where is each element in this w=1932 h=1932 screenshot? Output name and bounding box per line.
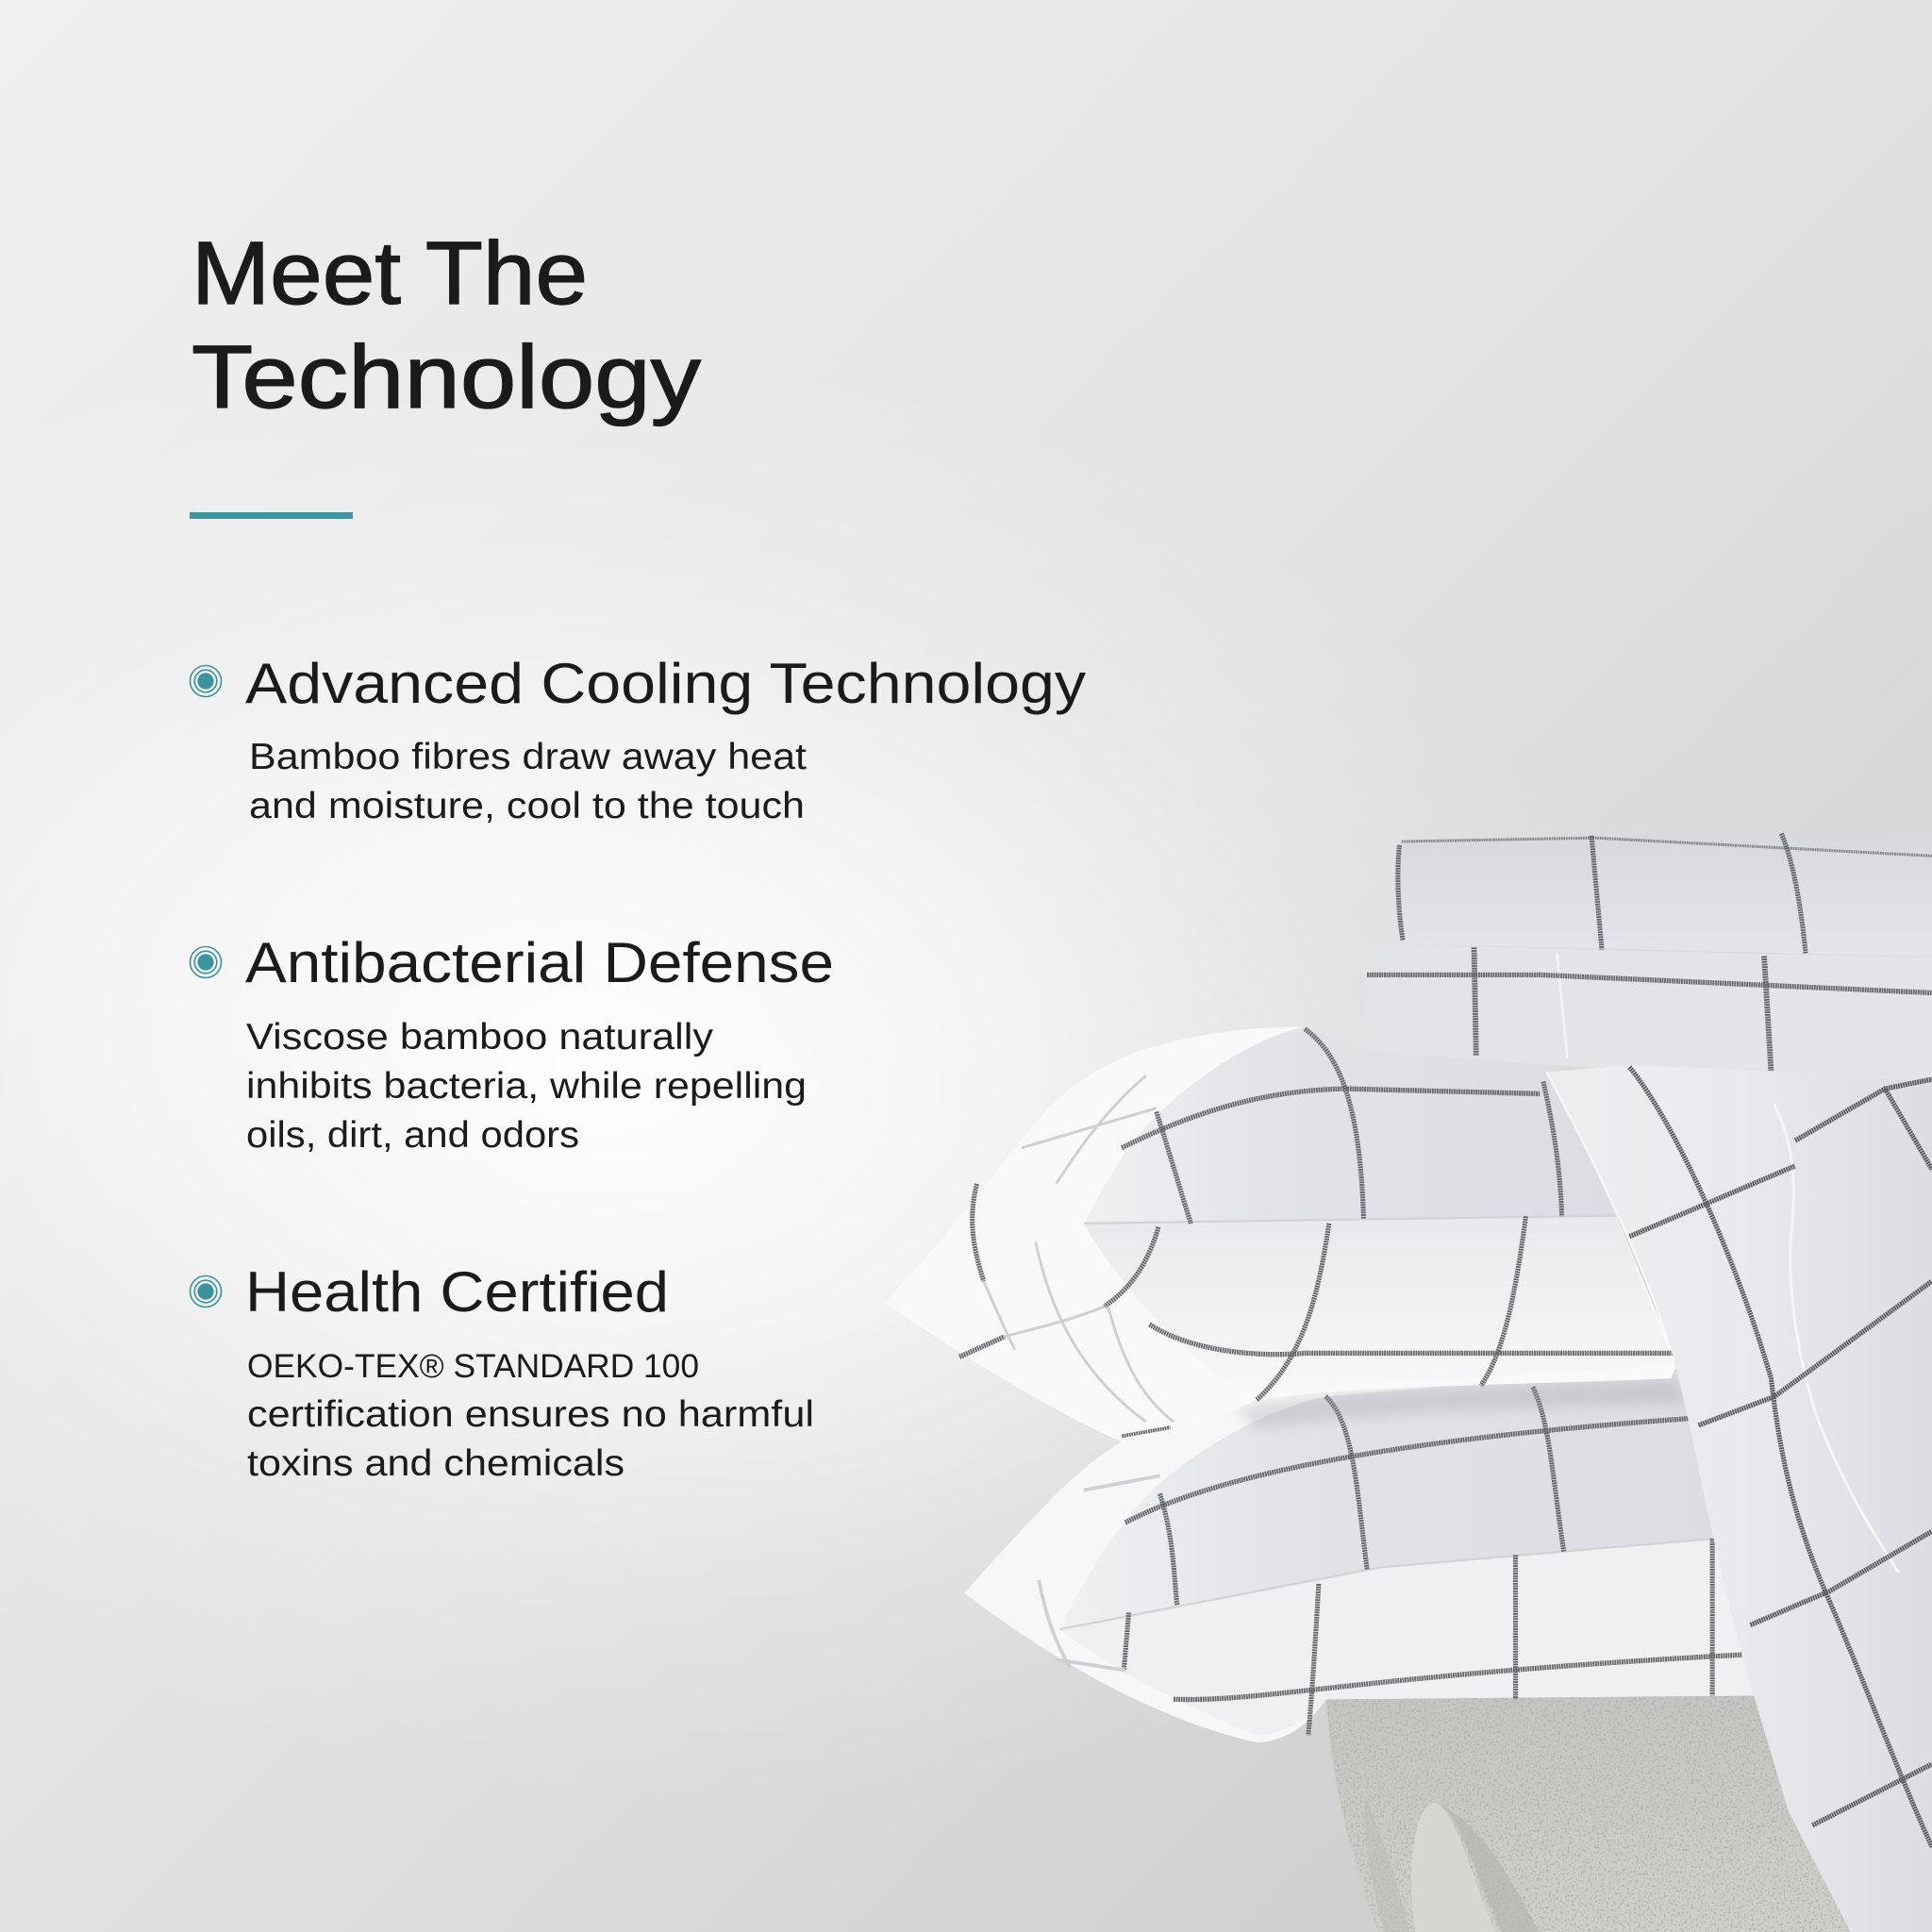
text: antibacterial description: oils, dirt, and odors: [246, 1115, 579, 1156]
feature: advanced cooling: [191, 652, 1086, 826]
text: advanced cooling description: Bamboo fibres draw away heat: [249, 737, 807, 777]
feature: antibacterial defense: [191, 931, 834, 1156]
photo: stacked bedding on stone stool: [885, 834, 1932, 1932]
pillow upper: [885, 1026, 1678, 1443]
icon: target bullet: [191, 947, 221, 977]
stone stool: [1325, 1689, 1932, 1932]
text: advanced cooling description: [249, 737, 807, 826]
title: Meet The: [192, 224, 588, 324]
title: [192, 224, 702, 427]
text: health certified description: OEKO-TEX® STANDARD 100: [247, 1348, 699, 1385]
accent rule: [190, 512, 353, 519]
draped sheet: [1546, 1065, 1932, 1932]
text: advanced cooling description: and moisture, cool to the touch: [249, 786, 805, 826]
text: health certified description: [247, 1348, 814, 1484]
icon: target bullet: [191, 666, 221, 696]
folded sheet top: [1394, 834, 1932, 957]
heading: antibacterial defense: Antibacterial Defense: [245, 931, 834, 994]
text: antibacterial description: [246, 1017, 807, 1156]
text: health certified description: toxins and chemicals: [247, 1443, 625, 1484]
text: health certified description: certification ensures no harmful: [247, 1394, 814, 1435]
heading: advanced cooling: Advanced Cooling Technology: [245, 652, 1086, 715]
pillow lower: [964, 1372, 1760, 1742]
text: antibacterial description: inhibits bacteria, while repelling: [246, 1066, 807, 1107]
text: antibacterial description: Viscose bamboo naturally: [246, 1017, 714, 1058]
feature: health certified: [191, 1260, 814, 1484]
shadow between pillows: [1236, 1378, 1689, 1429]
folded sheet second: [1365, 944, 1932, 1081]
heading: health certified: Health Certified: [245, 1260, 669, 1324]
icon: target bullet: [191, 1275, 221, 1307]
title: Technology: [192, 327, 702, 427]
